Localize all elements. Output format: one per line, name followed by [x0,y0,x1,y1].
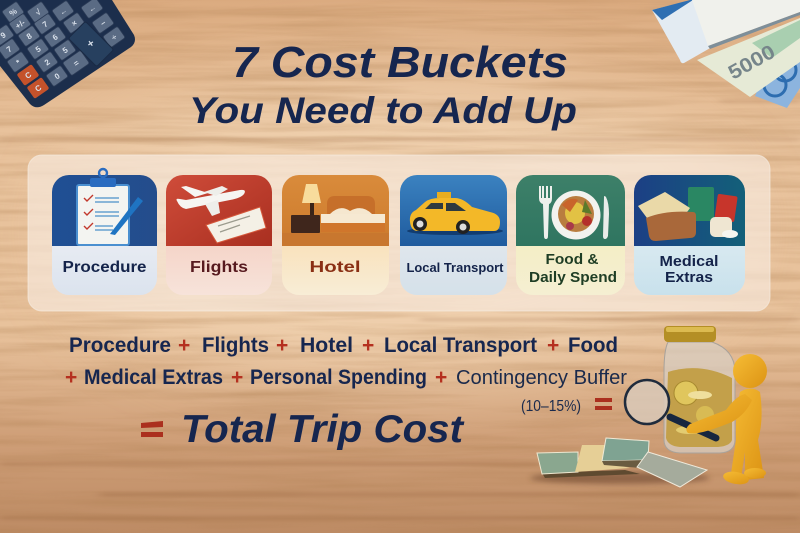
label: local transport: Local Transport [406,260,504,275]
card: local transport [400,175,507,295]
calculator: * [14,57,23,67]
calculator: ÷ [110,32,119,42]
formula line one: + [547,334,559,357]
formula line two [65,366,627,415]
calculator [0,0,135,107]
formula line one: Food [568,334,618,357]
label: food and daily spend: Food & [546,252,599,268]
calculator: × [70,18,79,28]
calculator: √ [34,7,43,17]
label: food and daily spend: Daily Spend [529,270,617,286]
formula line one [69,334,618,357]
calculator: 7 [5,44,14,54]
title: 7 Cost Buckets [232,38,568,87]
formula line one: + [276,334,288,357]
formula line two: Personal Spending [250,366,427,389]
icon: clipboard ring [99,169,107,177]
formula line one: Flights [202,334,269,357]
label: food and daily spend [529,252,617,286]
calculator: 0 [53,71,62,81]
label: hotel: Hotel [310,259,360,276]
calculator: 8 [25,31,34,41]
calculator: +/- [14,18,27,31]
calculator: 5 [61,45,70,55]
label: medical extras: Medical [660,254,718,270]
calculator: ← [57,5,69,17]
formula line one: + [362,334,374,357]
equals sign: left [141,421,163,437]
formula line two: + [435,366,447,389]
calculator: % [8,7,19,18]
label: procedure: Procedure [62,259,147,276]
card: procedure [52,175,157,295]
card: food and daily spend [516,175,625,295]
formula line one: Hotel [300,334,353,357]
calculator: 6 [51,32,60,42]
calculator: 2 [43,57,52,67]
total trip cost: Total Trip Cost [181,408,465,451]
calculator: + [85,37,97,51]
tickets and banknotes: 5000 [725,41,779,84]
card: medical extras [634,175,745,295]
formula line one: Procedure [69,334,171,357]
formula line two: (10–15%) [521,398,581,415]
card: hotel [282,175,389,295]
formula line two: + [231,366,243,389]
calculator: C [33,83,43,94]
card: flights [166,175,272,295]
calculator: C [23,70,33,81]
banknotes [530,438,710,487]
calculator: 5 [34,44,43,54]
equals sign: right [595,398,612,410]
title [189,38,577,131]
formula line one: + [178,334,190,357]
panel: cost buckets [28,155,770,311]
label: medical extras [660,254,718,286]
yellow figure [686,354,767,486]
formula line two: Medical Extras [84,366,223,389]
title: You Need to Add Up [189,90,577,131]
calculator: ← [86,2,98,14]
formula line one: Local Transport [384,334,537,357]
formula line two: + [65,366,77,389]
calculator: = [72,58,81,68]
tickets and banknotes [652,0,800,108]
calculator: 7 [41,19,50,29]
magnifying glass [625,380,716,438]
formula line two: Contingency Buffer [456,367,627,389]
calculator: − [99,18,108,28]
label: medical extras: Extras [665,270,713,286]
label: flights: Flights [190,259,248,276]
jar of coins [664,326,735,453]
